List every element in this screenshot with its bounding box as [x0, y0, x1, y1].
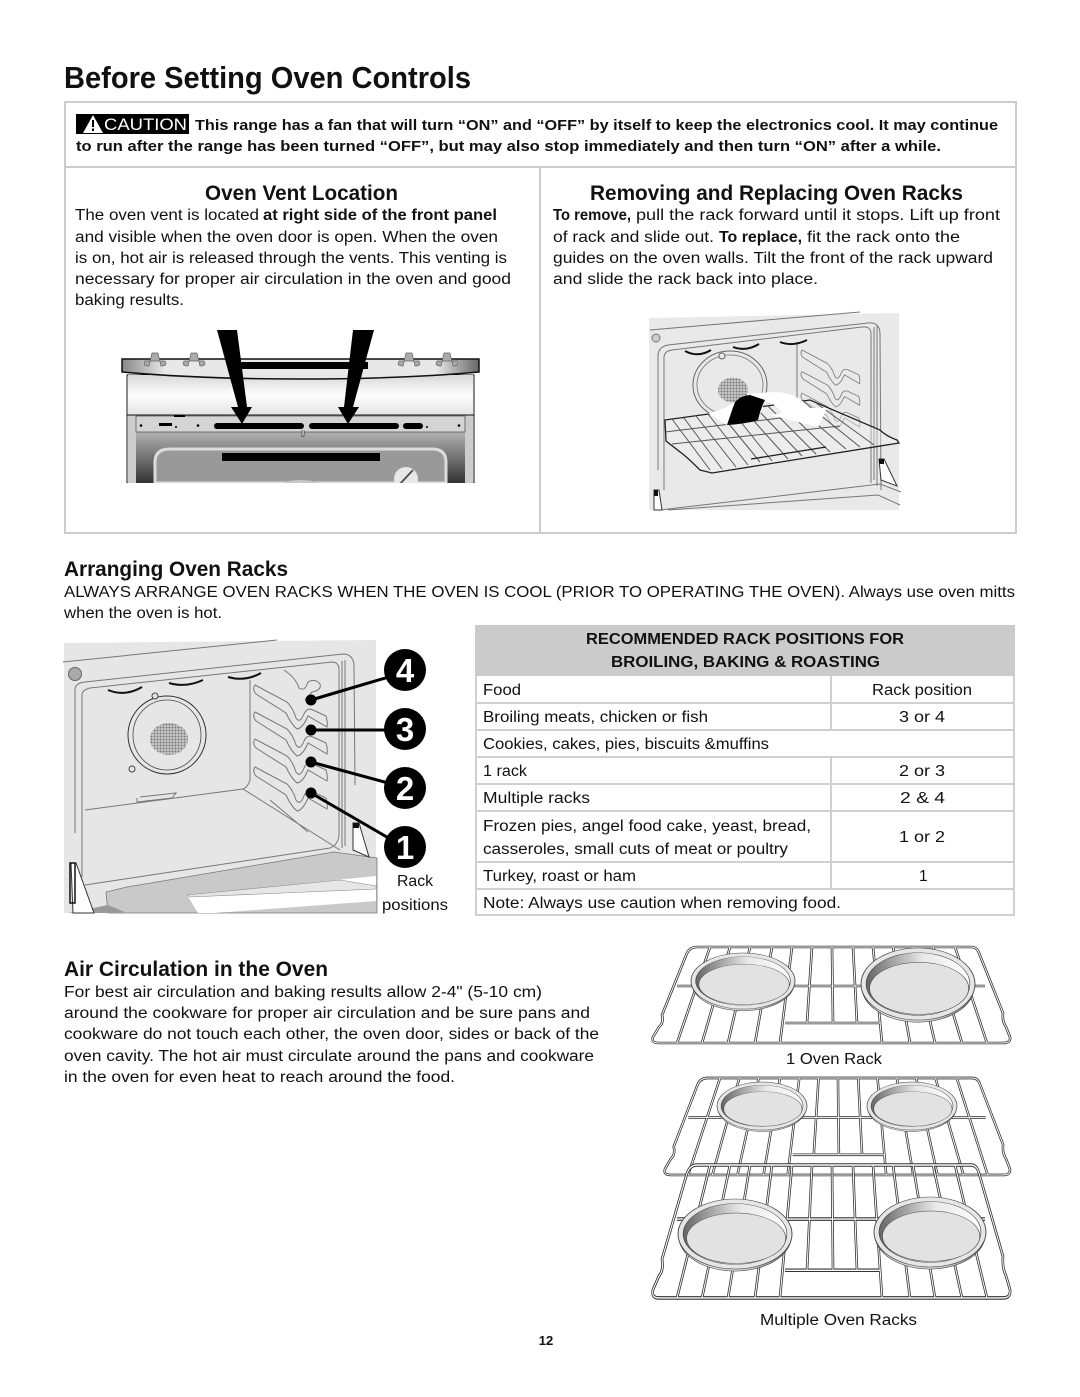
text: air circulation: around the cookware for proper air circulation and be sure pans and: [64, 1005, 590, 1022]
illustration: multiple oven racks with pans: [653, 1078, 1010, 1298]
illustration: range front with oven vent: [120, 353, 480, 493]
caution notice: CAUTION: [104, 115, 187, 134]
rack position pointers and numbers: 3: [396, 711, 414, 748]
text: air circulation: in the oven for even heat to reach around the food.: [64, 1069, 455, 1086]
text: oven vent location: necessary for proper air circulation in the oven and good: [75, 271, 511, 288]
cooktop: [122, 353, 479, 379]
label: rack positions: Rack: [397, 873, 433, 890]
text: removing and replacing oven racks: of rack and slide out.: [553, 229, 714, 246]
table: recommended rack positions: Turkey, roast or ham: [483, 868, 636, 885]
table header: RECOMMENDED RACK POSITIONS FOR: [586, 631, 904, 648]
table: recommended rack positions: Multiple racks: [483, 790, 590, 807]
rack position pointers and numbers: 4: [396, 652, 415, 689]
panel: frame with caution and oven vent sections: [65, 102, 1016, 533]
caution notice: [76, 114, 998, 155]
rack position pointers and numbers: 1: [396, 829, 414, 866]
side rack guides: [801, 350, 860, 428]
text: air circulation: oven cavity. The hot air must circulate around the pans and cookware: [64, 1048, 594, 1065]
table: recommended rack positions: 2 or 3: [899, 763, 945, 780]
text: oven vent location: and visible when the oven door is open. When the oven: [75, 229, 498, 246]
text: removing and replacing oven racks: [553, 207, 1001, 288]
label: 1 oven rack: 1 Oven Rack: [786, 1051, 882, 1068]
text: oven vent location: is on, hot air is released through the vents. This venting is: [75, 250, 507, 267]
text: removing and replacing oven racks: To remove,: [553, 207, 631, 224]
table header: [475, 625, 1015, 676]
oven rack: [665, 400, 899, 473]
hooks: [108, 673, 261, 693]
table: recommended rack positions: Cookies, cakes, pies, biscuits &muffins: [483, 736, 769, 753]
table: recommended rack positions: Rack position: [872, 682, 972, 699]
text: removing and replacing oven racks: fit the rack onto the: [807, 229, 960, 246]
heading: oven vent location: Oven Vent Location: [205, 182, 398, 205]
table header: BROILING, BAKING & ROASTING: [611, 654, 880, 671]
fan cover: [128, 696, 206, 774]
illustration: one oven rack with pans: [653, 947, 1010, 1043]
heading: removing and replacing oven racks: Removing and Replacing Oven Racks: [590, 182, 963, 205]
text: air circulation: For best air circulation and baking results allow 2-4" (5-10 cm): [64, 984, 542, 1001]
label: multiple oven racks: Multiple Oven Racks: [760, 1312, 917, 1329]
table: recommended rack positions: Frozen pies, angel food cake, yeast, bread,: [483, 818, 811, 835]
table: recommended rack positions: Note: Always use caution when removing food.: [483, 895, 841, 912]
open door: [106, 852, 377, 913]
oven door window: [155, 449, 446, 483]
table: recommended rack positions: 1: [919, 868, 928, 885]
arrow: right vent pointer: [338, 330, 374, 424]
door hinges: [654, 459, 897, 510]
table: recommended rack positions: Broiling meats, chicken or fish: [483, 709, 708, 726]
table: recommended rack positions: Food: [483, 682, 521, 699]
table: recommended rack positions: 3 or 4: [899, 709, 945, 726]
text: oven vent location: baking results.: [75, 292, 184, 309]
text: air circulation: [64, 984, 599, 1086]
table: recommended rack positions: [475, 625, 1015, 915]
caution notice: to run after the range has been turned “OFF”, but may also stop immediately and then turn “ON” after a while.: [76, 138, 941, 155]
illustration: oven cavity with rack positions: [63, 640, 377, 913]
text: removing and replacing oven racks: and slide the rack back into place.: [553, 271, 818, 288]
arrow: left vent pointer: [217, 330, 252, 424]
text: removing and replacing oven racks: pull the rack forward until it stops. Lift up front: [636, 207, 1001, 224]
label: rack positions: [382, 873, 448, 914]
rack guides: [254, 670, 327, 811]
table: recommended rack positions: 1 or 2: [899, 829, 945, 846]
label: rack positions: positions: [382, 897, 448, 914]
illustration: removing oven rack: [649, 312, 901, 510]
table: recommended rack positions: 1 rack: [483, 763, 527, 780]
text: removing and replacing oven racks: To replace,: [719, 229, 802, 246]
page number: 12: [539, 1333, 553, 1348]
rack position pointers and numbers: 2: [396, 770, 414, 807]
vents: [140, 415, 460, 429]
text: oven vent location: [75, 207, 511, 309]
heading: air circulation in the oven: Air Circulation in the Oven: [64, 958, 328, 981]
text: arranging oven racks: [63, 584, 1015, 622]
table: recommended rack positions: 2 & 4: [900, 790, 945, 807]
heading: arranging oven racks: Arranging Oven Racks: [64, 558, 288, 581]
text: arranging oven racks: ALWAYS ARRANGE OVEN RACKS WHEN THE OVEN IS COOL (PRIOR TO OPERATING THE OVEN). Always use oven mitts: [64, 584, 1015, 601]
arrow: rack removal curve: [708, 392, 827, 427]
rack position pointers and numbers: [306, 649, 426, 868]
hinges: [71, 823, 369, 913]
table: recommended rack positions: casseroles, small cuts of meat or poultry: [483, 841, 788, 858]
fan cover: [693, 351, 767, 419]
text: oven vent location: The oven vent is located: [75, 207, 259, 224]
title: Before Setting Oven Controls: [64, 60, 471, 95]
text: arranging oven racks: when the oven is hot.: [63, 605, 222, 622]
text: air circulation: cookware do not touch each other, the oven door, sides or back of the: [64, 1026, 599, 1043]
text: removing and replacing oven racks: guides on the oven walls. Tilt the front of the rack upward: [553, 250, 993, 267]
caution notice: This range has a fan that will turn “ON” and “OFF” by itself to keep the electronics cool. It may continue: [195, 117, 998, 134]
text: oven vent location: at right side of the front panel: [263, 207, 497, 224]
